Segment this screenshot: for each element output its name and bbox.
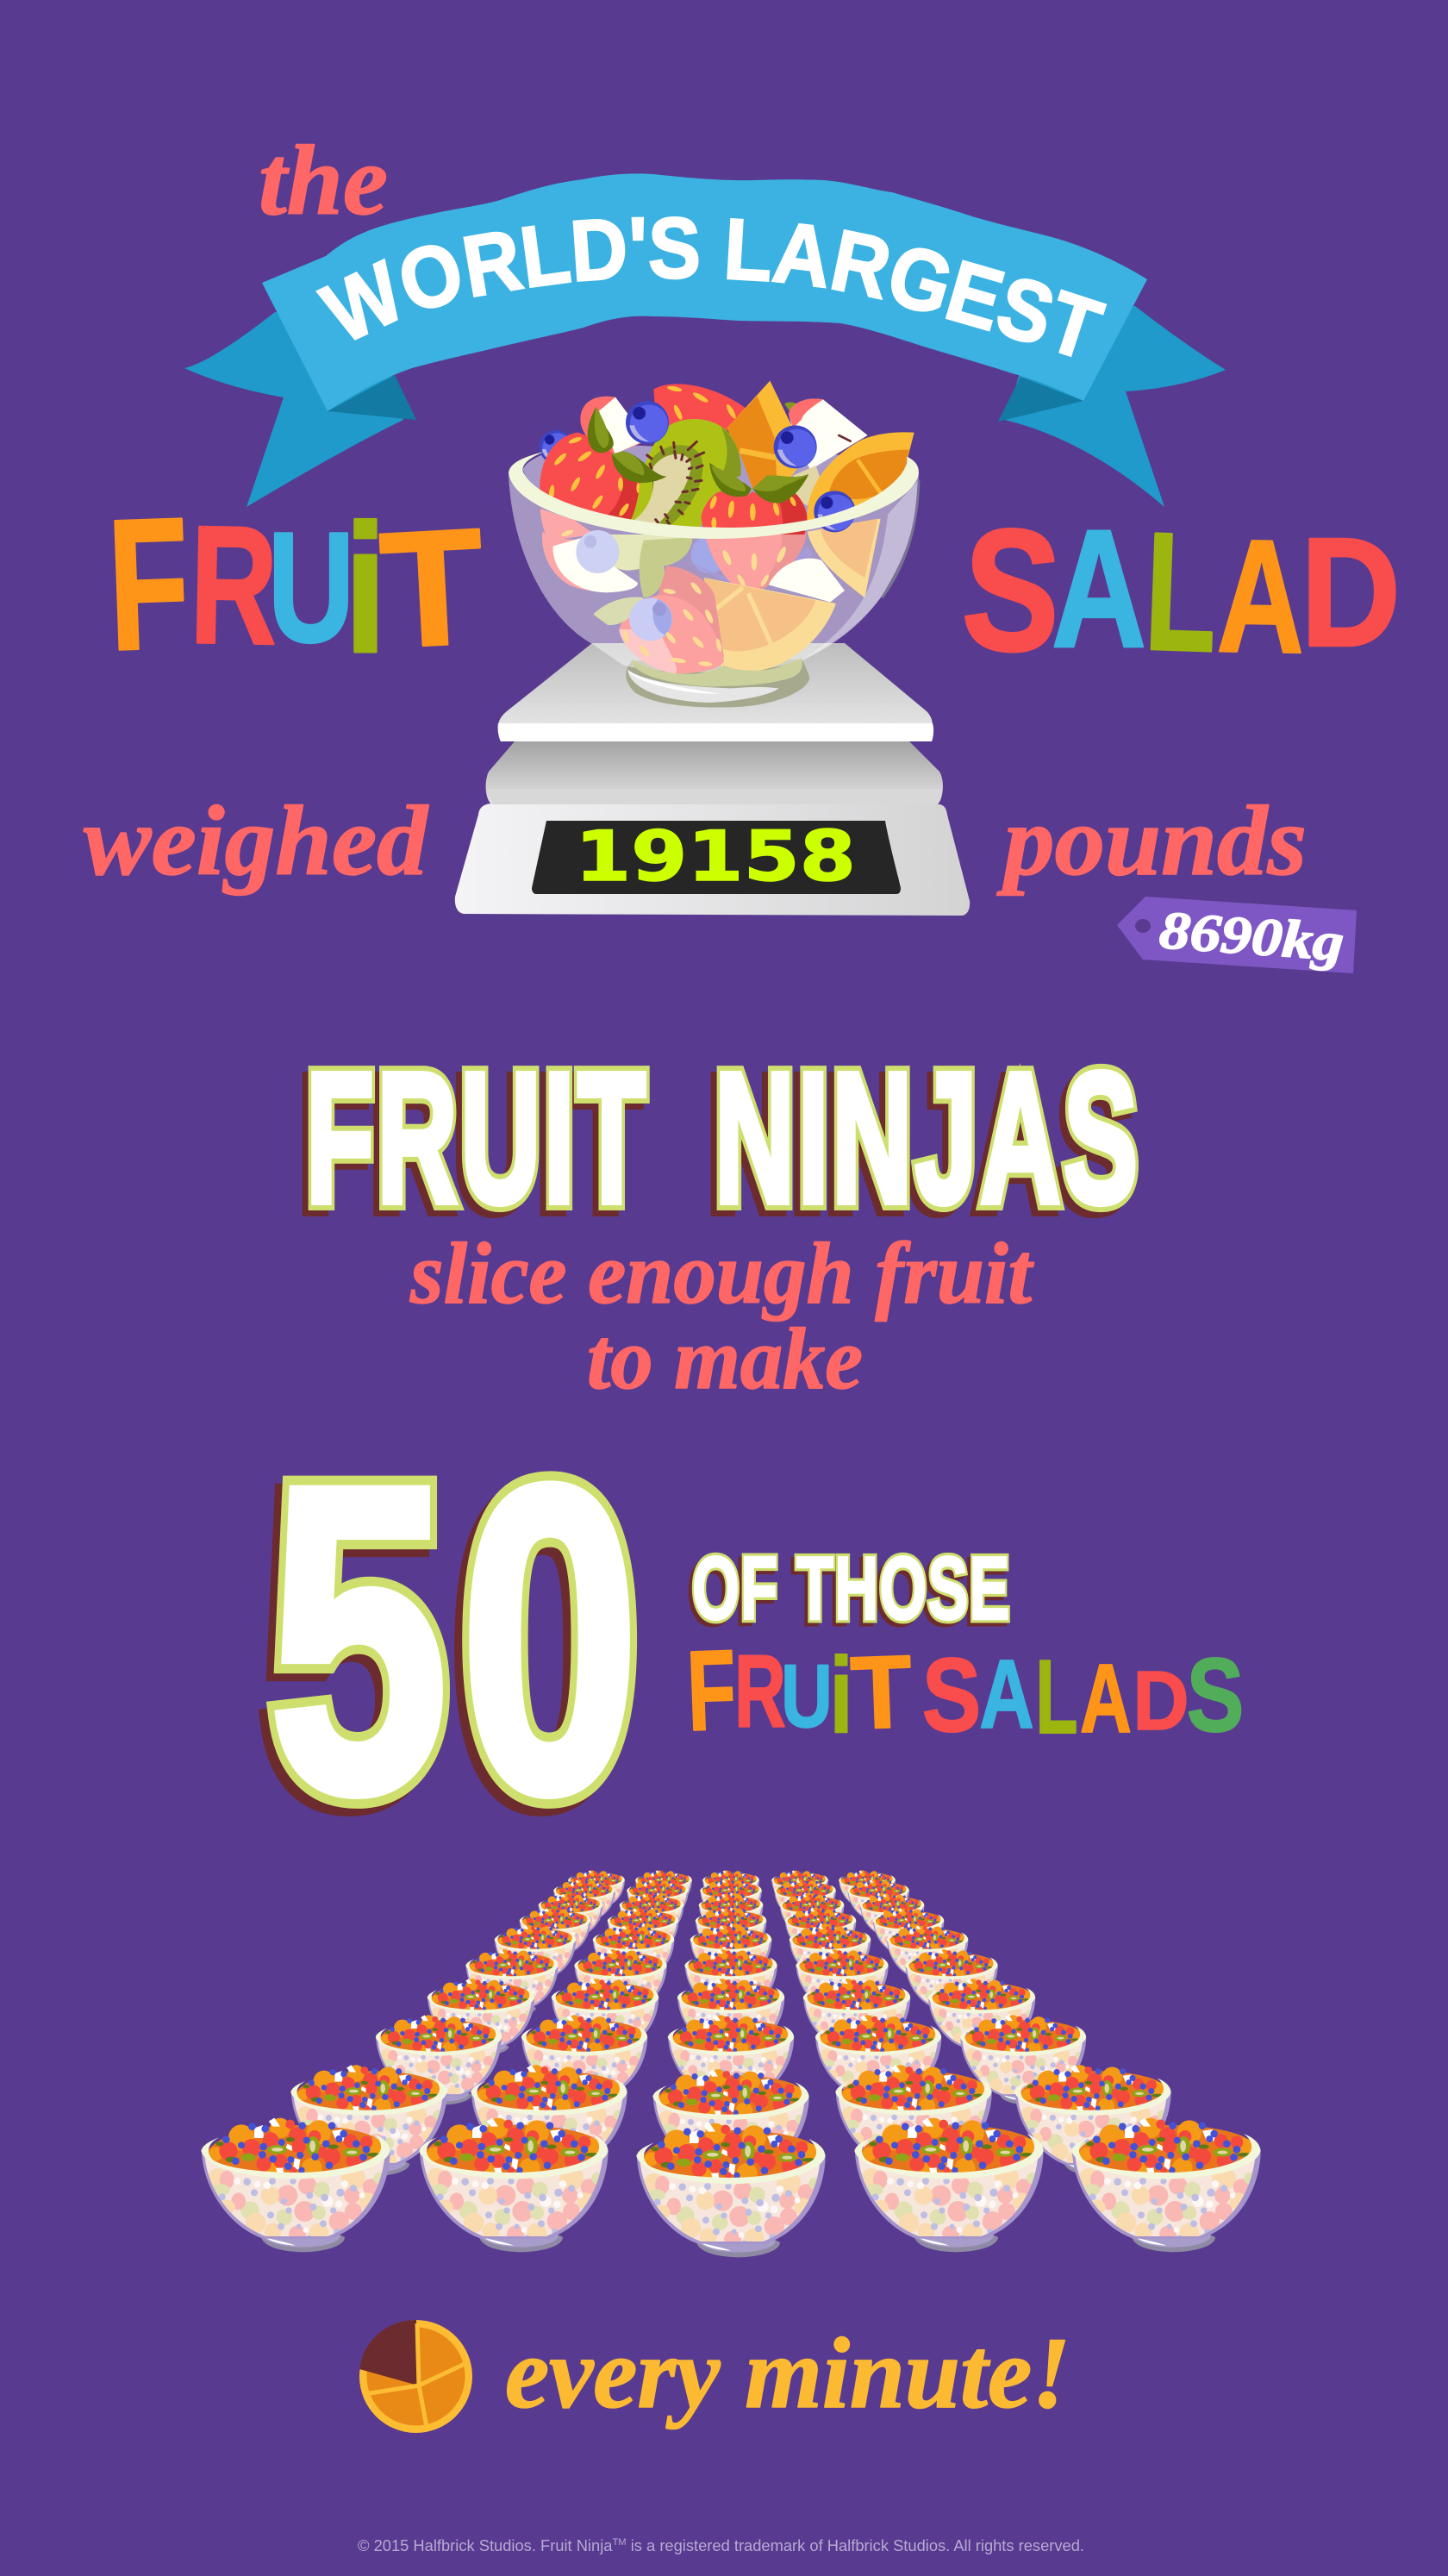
bowl rim (509, 451, 919, 539)
tag text: 8690kg (1158, 901, 1345, 972)
scale reading: 19158 (575, 816, 856, 897)
heading: FRUIT NINJAS: NINJAS (715, 1035, 1141, 1241)
kiwi slice (629, 419, 739, 532)
kitchen scale (455, 643, 970, 916)
bottom strawberry (701, 491, 808, 535)
orange wedge (727, 381, 797, 489)
scale neck (486, 741, 943, 804)
big number 50: 50 (269, 1397, 640, 1883)
letter A: A (1052, 495, 1146, 683)
ribbon left tail (184, 312, 403, 507)
letter F: F (105, 478, 192, 690)
letter R: R (734, 1634, 786, 1749)
kilogram tag (1117, 897, 1357, 973)
pounds label: pounds (996, 786, 1307, 897)
letter S: S (922, 1636, 981, 1754)
letter R: R (189, 490, 279, 679)
tag shape (1117, 897, 1357, 973)
letter U: U (267, 500, 355, 675)
letter L: L (1142, 497, 1220, 687)
letter T: T (376, 493, 489, 683)
leaf over strawberry (752, 474, 808, 503)
letter I: i (829, 1635, 853, 1755)
big number 50: 50 (269, 1397, 640, 1883)
ribbon banner: WORLD'S LARGEST (315, 216, 1107, 357)
footer copyright: is a registered trademark of Halfbrick Studios. All rights reserved. (627, 2537, 1084, 2554)
apple left (580, 397, 646, 454)
letter A: A (1216, 506, 1306, 686)
letter S: S (1187, 1636, 1244, 1754)
letter U: U (781, 1646, 833, 1746)
blueberries (626, 401, 669, 444)
inner glass back (523, 442, 908, 528)
letter T: T (849, 1633, 914, 1751)
letter D: D (1301, 506, 1401, 679)
bowl base (626, 660, 809, 708)
back blueberry (539, 430, 572, 464)
top strawberry (653, 384, 746, 431)
ribbon front (262, 173, 1147, 411)
glass body (509, 474, 919, 672)
weighed label: weighed (84, 786, 429, 897)
text: OF THOSE: OF THOSE (692, 1537, 1011, 1638)
heading word: SALAD (958, 491, 1401, 690)
letter S: S (958, 491, 1065, 690)
icon: orange slice clock (359, 2320, 472, 2433)
text: every minute!: every minute! (505, 2317, 1070, 2429)
scale display (532, 821, 901, 894)
left strawberry (540, 433, 646, 523)
footer copyright: TM (612, 2537, 627, 2548)
ribbon folds (328, 375, 1083, 422)
ribbon right tail (1005, 306, 1226, 507)
fruit bowl (509, 381, 919, 708)
letter L: L (1035, 1637, 1078, 1755)
letter A: A (979, 1639, 1034, 1749)
subheading: slice enough fruit: slice enough fruit (409, 1225, 1034, 1322)
heading: FRUIT NINJAS: FRUIT (306, 1035, 649, 1241)
heading word: the: the (259, 126, 388, 236)
orange slice right (807, 432, 914, 523)
blueberry front (814, 491, 855, 532)
leaves (588, 407, 752, 499)
heading: FRUIT NINJAS: NINJAS (715, 1035, 1141, 1241)
heading word: FRUIT (105, 478, 489, 691)
subheading: to make: to make (587, 1310, 863, 1408)
fruit seen through glass (540, 509, 881, 687)
scale body (455, 803, 970, 916)
heading: FRUIT NINJAS (306, 1035, 1141, 1241)
letter A: A (1080, 1644, 1132, 1754)
apple right (789, 398, 868, 470)
footer copyright: © 2015 Halfbrick Studios. Fruit Ninja (358, 2537, 608, 2554)
tag hole (1135, 919, 1151, 933)
text: OF THOSE: OF THOSE (692, 1537, 1011, 1638)
letter D: D (1133, 1654, 1189, 1748)
letter I: i (344, 486, 387, 691)
letter F: F (685, 1627, 738, 1755)
ribbon banner (184, 173, 1226, 507)
scale plate (498, 643, 933, 726)
text: FRUIT SALADS (685, 1627, 1244, 1755)
grid of 50 fruit salad bowls (201, 1871, 1261, 2257)
heading: FRUIT NINJAS: FRUIT (306, 1035, 649, 1241)
ribbon text (343, 278, 1100, 366)
